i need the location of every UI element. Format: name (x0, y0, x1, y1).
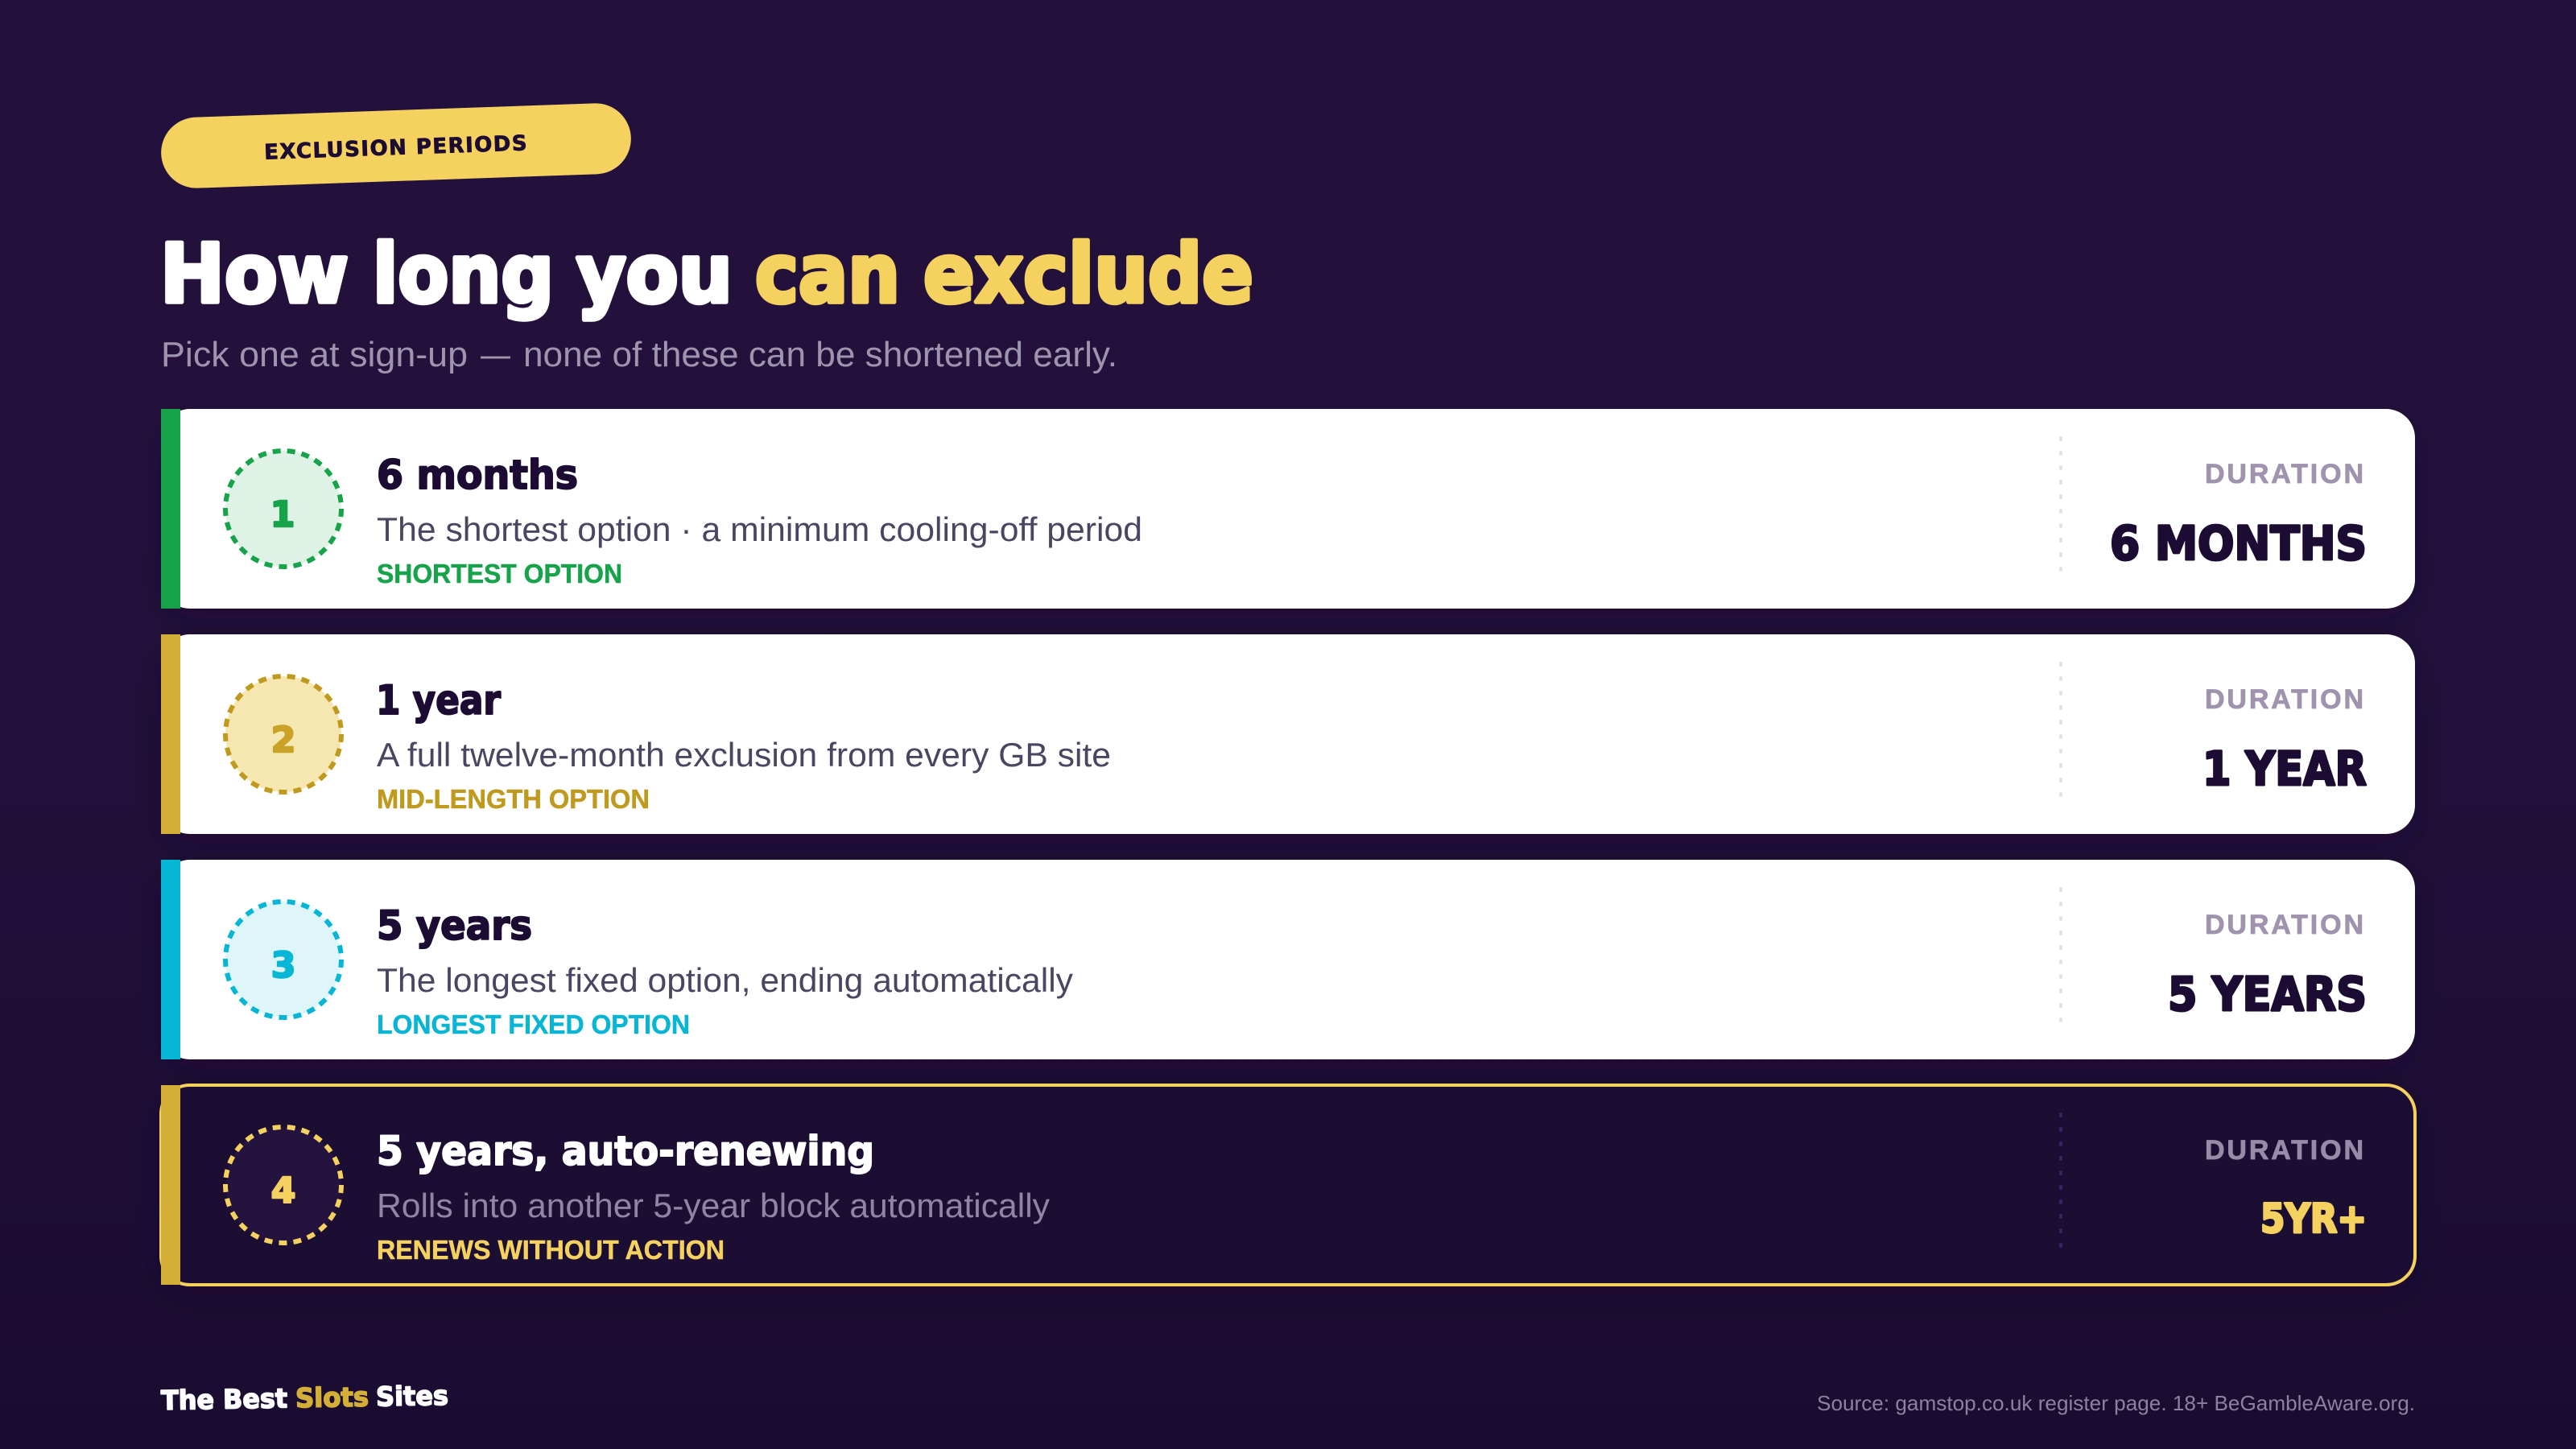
duration value: 1 YEAR (2202, 741, 2367, 796)
number badge 4: 4 (271, 1170, 295, 1212)
description: A full twelve-month exclusion from every GB site (377, 736, 1111, 774)
title: How (160, 226, 349, 321)
title: exclude (923, 226, 1253, 321)
number badge 2: 2 (271, 720, 295, 761)
brand logo (161, 1380, 448, 1416)
title: you (576, 226, 733, 321)
row title: 5 years, auto-renewing (377, 1128, 874, 1174)
tag: LONGEST FIXED OPTION (377, 1009, 690, 1039)
row title: 5 years (377, 902, 532, 949)
tag: MID-LENGTH OPTION (377, 784, 650, 814)
panel: 1 year (161, 634, 2415, 834)
description: The shortest option · a minimum cooling-off period (377, 510, 1142, 548)
number badge 4 (225, 1127, 341, 1243)
brand logo: The Best (161, 1382, 288, 1416)
accent bar (161, 634, 180, 834)
description: Rolls into another 5-year block automatically (377, 1187, 1050, 1224)
panel: 5 years auto-renewing (161, 1085, 2415, 1285)
tag pill: exclusion periods: EXCLUSION PERIODS (264, 131, 529, 165)
duration label: DURATION (2205, 684, 2363, 715)
duration label: DURATION (2205, 459, 2363, 489)
panel: 5 years (161, 860, 2415, 1059)
accent bar (161, 409, 180, 609)
tag: RENEWS WITHOUT ACTION (377, 1235, 724, 1265)
duration label: DURATION (2205, 1135, 2363, 1166)
title (160, 226, 1253, 321)
duration value: 5 YEARS (2168, 967, 2367, 1022)
tag pill: exclusion periods (160, 102, 632, 189)
source note: Source: gamstop.co.uk register page. 18+ BeGambleAware.org. (1817, 1391, 2415, 1415)
number badge 3 (225, 902, 341, 1018)
number badge 2 (225, 676, 341, 792)
accent bar (161, 1085, 180, 1285)
row title: 1 year (376, 677, 501, 724)
duration value: 5YR+ (2260, 1195, 2367, 1242)
number badge 3: 3 (271, 945, 295, 986)
row title: 6 months (377, 452, 578, 498)
accent bar (161, 860, 180, 1059)
subtitle: — (481, 335, 510, 374)
title: can (755, 226, 900, 321)
brand logo: Slots (295, 1381, 369, 1414)
panel: 6 months (161, 409, 2415, 609)
subtitle (161, 335, 1117, 374)
number badge 1: 1 (270, 494, 295, 535)
brand logo: Sites (376, 1380, 448, 1412)
number badge 1 (225, 451, 341, 567)
subtitle: Pick one at sign-up (161, 335, 468, 374)
description: The longest fixed option, ending automatically (377, 961, 1073, 999)
subtitle: none of these can be shortened early. (523, 335, 1117, 374)
duration value: 6 MONTHS (2110, 516, 2367, 571)
tag: SHORTEST OPTION (377, 559, 622, 588)
duration label: DURATION (2205, 910, 2363, 940)
title: long (373, 226, 554, 321)
